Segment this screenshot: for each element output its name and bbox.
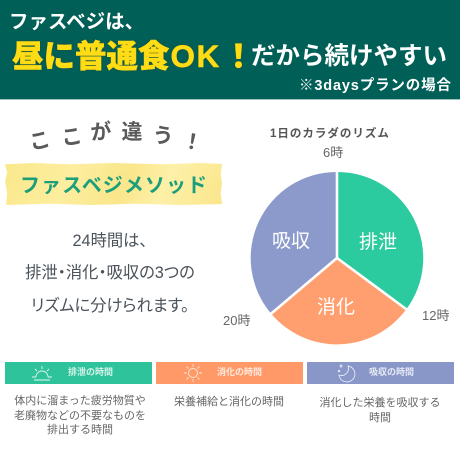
label: 6時: 6時	[323, 145, 343, 160]
header line 1: ファスベジは、	[9, 11, 144, 33]
chart title: 1日のカラダのリズム	[270, 128, 390, 140]
bar label: 消化の時間	[217, 367, 262, 377]
description: 排泄	[14, 394, 146, 436]
slice: 吸収	[251, 172, 337, 314]
description: 吸収: 消化した栄養を吸収する	[320, 397, 440, 409]
body text: 排泄・消化・吸収の3つの	[25, 264, 195, 282]
banner text: ファスベジメソッド	[20, 174, 208, 196]
slice: 排泄	[337, 172, 423, 309]
description: 排泄: 体内に溜まった疲労物質や	[14, 395, 146, 407]
slice: 排泄: 排泄	[359, 231, 397, 253]
heading: ここが違う！: が	[90, 120, 112, 145]
description: 排泄: 老廃物などの不要なものを	[14, 410, 146, 422]
icon: moon	[338, 364, 356, 382]
headline white: だから続けやすい	[251, 43, 447, 70]
label: 12時: 12時	[422, 308, 449, 323]
bar: 吸収の時間	[307, 362, 454, 384]
heading: ここが違う！: う	[152, 124, 175, 149]
description: 吸収: 時間	[369, 412, 391, 424]
body text	[25, 232, 195, 314]
slice: 消化: 消化	[317, 296, 355, 318]
headline yellow: 昼に普通食OK！	[12, 38, 254, 74]
bar label: 吸収の時間	[369, 367, 414, 377]
heading: ここが違う！: 違	[122, 121, 142, 144]
slice: 吸収: 吸収	[272, 230, 310, 252]
header band	[0, 0, 460, 100]
description: 消化: 栄養補給と消化の時間	[174, 396, 284, 408]
heading: ここが違う！: ！	[180, 129, 204, 156]
bar: 消化の時間	[156, 362, 303, 384]
body text: リズムに分けられます。	[31, 296, 189, 314]
bar label: 排泄の時間	[68, 367, 113, 377]
label: 20時: 20時	[223, 313, 250, 328]
pie chart	[250, 172, 424, 344]
icon: sun	[184, 364, 202, 382]
bar: 排泄の時間	[5, 362, 152, 384]
description: 吸収	[320, 396, 440, 424]
heading: ここが違う！: こ	[27, 128, 53, 155]
icon: sunrise	[32, 366, 52, 380]
description: 排泄: 排出する時間	[47, 424, 113, 436]
heading: ここが違う！: こ	[60, 125, 84, 150]
heading: ここが違う！	[27, 120, 204, 156]
banner: ファスベジメソッド	[5, 163, 222, 205]
plan note: ※3daysプランの場合	[299, 78, 452, 94]
slice: 消化	[271, 258, 406, 344]
body text: 24時間は、	[72, 232, 148, 250]
